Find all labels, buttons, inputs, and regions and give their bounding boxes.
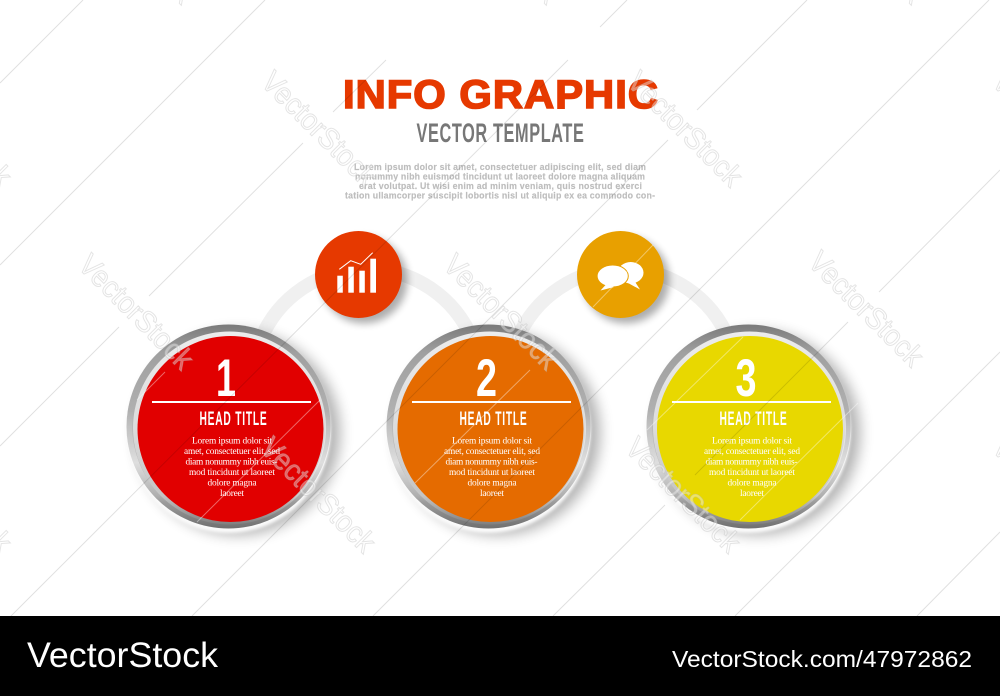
intro paragraph: nonummy nibh euismod tincidunt ut laoreet dolore magna aliquam xyxy=(355,172,645,182)
head title: HEAD TITLE xyxy=(460,409,528,430)
watermark text: VectorStock xyxy=(802,245,930,374)
step number 1: 1 xyxy=(216,349,236,408)
body text: laoreet xyxy=(220,489,244,499)
body text: Lorem ipsum dolor sit xyxy=(712,436,792,446)
divider line xyxy=(152,401,311,403)
intro paragraph: erat volutpat. Ut wisi enim ad minim veniam, quis nostrud exerci xyxy=(359,181,642,191)
watermark text: VectorStock xyxy=(437,248,565,377)
divider line xyxy=(672,401,831,403)
body text: mod tincidunt ut laoreet xyxy=(449,468,535,478)
connector arc: right xyxy=(517,269,729,340)
watermark text: VectorStock xyxy=(254,431,382,560)
step number 2: 2 xyxy=(476,349,497,408)
footer logo text: VectorStock xyxy=(27,636,219,675)
body text: laoreet xyxy=(740,489,764,499)
body text: Lorem ipsum dolor sit xyxy=(192,436,272,446)
head title: HEAD TITLE xyxy=(720,409,788,430)
title block xyxy=(343,73,659,200)
watermark text: VectorStock xyxy=(72,248,200,377)
icon badge: speech bubbles xyxy=(577,231,670,324)
intro paragraph: Lorem ipsum dolor sit amet, consectetuer adipiscing elit, sed diam xyxy=(354,162,646,172)
body text: diam nonummy nibh euis- xyxy=(706,458,798,468)
body text: amet, consectetuer elit, sed xyxy=(444,447,540,457)
watermark text: VectorStock xyxy=(621,65,749,194)
watermark text: VectorStock xyxy=(255,65,383,194)
subtitle: VECTOR TEMPLATE xyxy=(416,118,584,148)
divider line xyxy=(412,401,571,403)
body text: amet, consectetuer elit, sed xyxy=(184,447,280,457)
body text: dolore magna xyxy=(728,478,777,488)
body text: dolore magna xyxy=(468,478,517,488)
body text: diam nonummy nibh euis- xyxy=(186,458,278,468)
icon badge: bar chart xyxy=(315,231,408,324)
footer bar xyxy=(0,616,1000,696)
body text xyxy=(184,436,280,499)
body text: amet, consectetuer elit, sed xyxy=(704,447,800,457)
panel: step 3 yellow xyxy=(646,324,860,535)
step number 3: 3 xyxy=(736,349,756,408)
body text xyxy=(704,436,800,499)
footer image id: VectorStock.com/47972862 xyxy=(672,646,972,672)
body text: diam nonummy nibh euis- xyxy=(446,458,538,468)
title: INFO GRAPHIC xyxy=(343,73,659,117)
watermark text: VectorStock xyxy=(619,431,747,560)
body text: mod tincidunt ut laoreet xyxy=(189,468,275,478)
body text xyxy=(444,436,540,499)
body text: laoreet xyxy=(480,489,504,499)
icon: speech bubbles xyxy=(597,262,644,290)
intro paragraph: tation ullamcorper suscipit lobortis nisl ut aliquip ex ea commodo con- xyxy=(345,190,655,200)
body text: mod tincidunt ut laoreet xyxy=(709,468,795,478)
intro paragraph xyxy=(345,162,655,200)
icon: bar chart with trend line xyxy=(337,253,376,293)
body text: Lorem ipsum dolor sit xyxy=(452,436,532,446)
connector arc: left xyxy=(260,269,472,340)
panel: step 2 orange xyxy=(386,324,600,535)
panel: step 1 red xyxy=(126,324,340,535)
body text: dolore magna xyxy=(208,478,257,488)
head title: HEAD TITLE xyxy=(200,409,268,430)
